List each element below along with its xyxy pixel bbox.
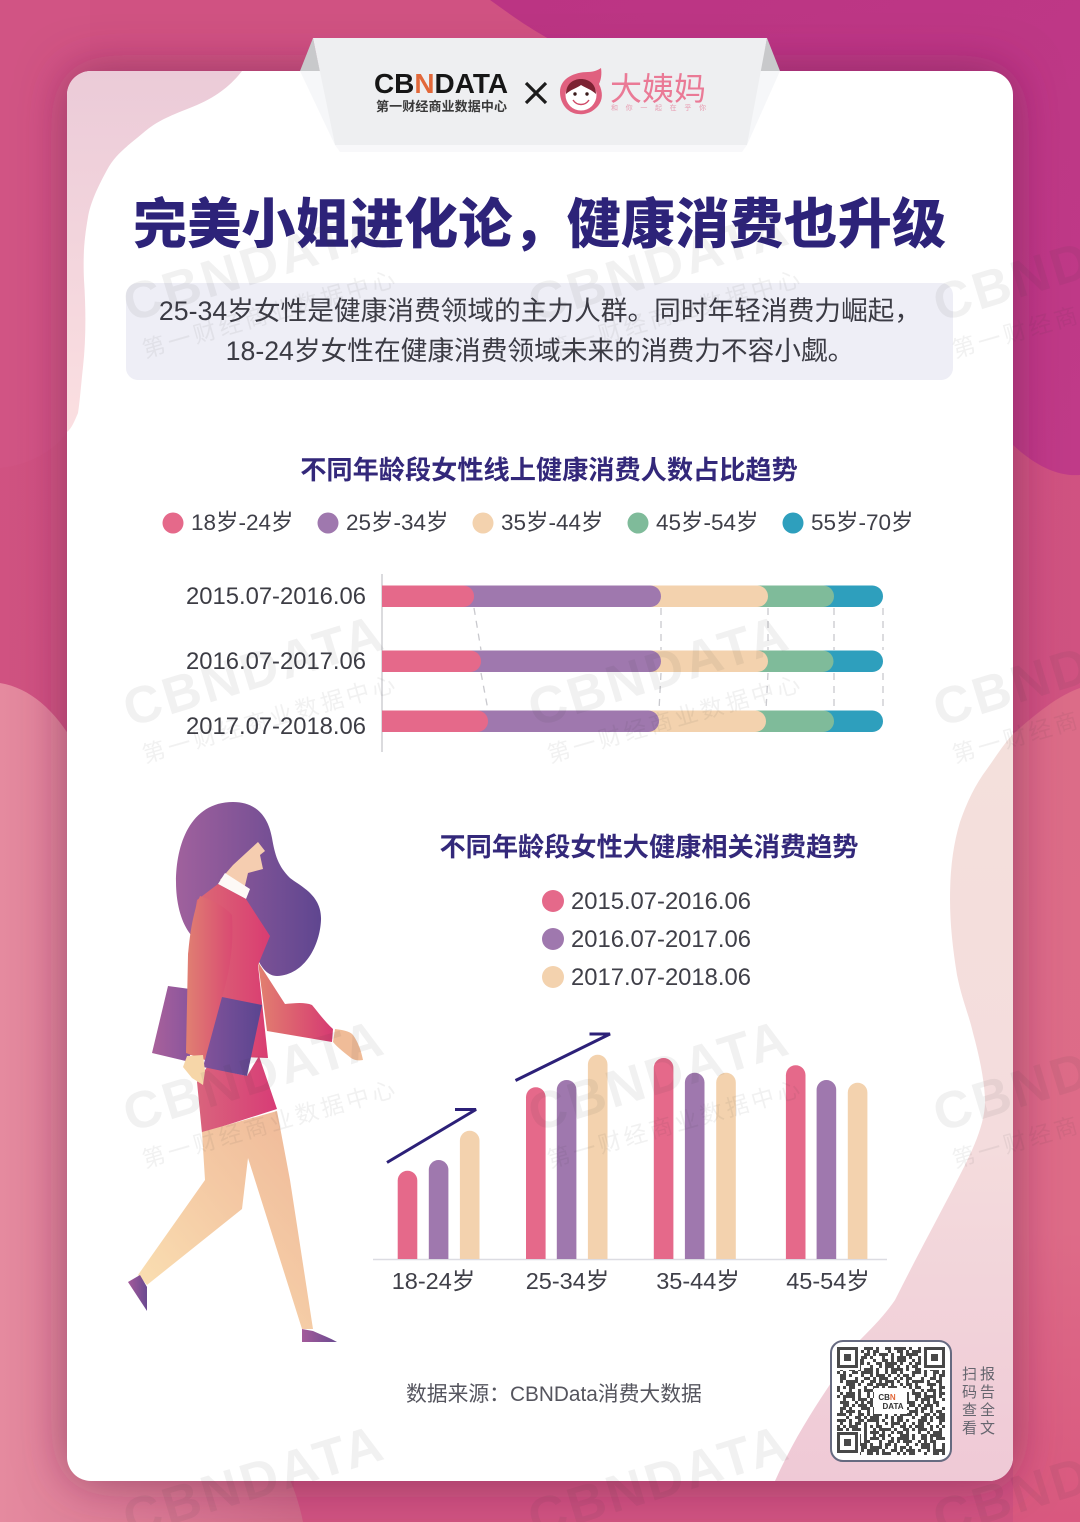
legend: age groups: 55岁-70岁 [811,510,914,535]
folder back [152,986,190,1062]
watermarks: 第一财经商业数据中心 [544,265,806,363]
legend: age groups: 35岁-44岁 [501,510,604,535]
watermarks: CBNDATA [522,199,797,333]
legs [138,1111,313,1329]
legend: periods: 2017.07-2018.06 [571,964,751,991]
QR caption: 全 [980,1401,995,1419]
watermarks: 第一财经商业数据中心 [544,670,806,768]
legend: age groups: 45岁-54岁 [656,510,759,535]
QR caption: 告 [980,1384,995,1401]
group 25-34: 25-34岁 [526,1268,609,1294]
legend: periods: 2016.07-2017.06 [571,926,751,953]
watermarks: CBNDATA [522,1009,797,1143]
group 35-44: 35-44岁 [656,1268,740,1294]
watermarks: CBNDATA [522,604,797,738]
heading: column chart: 不同年龄段女性大健康相关消费趋势 [440,832,858,862]
legend: age groups [162,510,914,535]
watermarks: 第一财经商业数据中心 [139,265,401,363]
QR caption: 文 [980,1420,995,1437]
QR caption: 扫 [962,1366,977,1383]
QR caption: 码 [962,1384,977,1401]
watermarks [117,199,1080,1522]
watermarks: CBNDATA [117,199,392,333]
watermarks: CBNDATA [117,604,392,738]
bar 2017-2018 [382,710,883,732]
bar 2016-2017 [382,650,883,672]
stacked bar chart [186,574,883,752]
intro text panel: 18-24岁女性在健康消费领域未来的消费力不容小觑。 [226,336,854,366]
legend: periods: 2015.07-2016.06 [571,888,751,915]
watermarks: 第一财经商业数据中心 [139,670,401,768]
logo: 大姨妈 [560,68,706,114]
back arm and hand [258,962,363,1060]
QR centre logo: DATA [882,1402,904,1411]
row labels: 2015.07-2016.06 [186,583,366,610]
shoes [128,1275,337,1342]
watermarks: CBNDATA [117,1009,392,1143]
jacket [188,884,270,1058]
illustration: walking woman [128,802,363,1342]
intro text panel [126,283,953,380]
logo: 大姨妈: 大姨妈 [610,71,706,107]
legend: age groups: 18岁-24岁 [191,510,294,535]
group 45-54 [786,1065,870,1294]
title: 完美小姐进化论，健康消费也升级 [133,195,946,255]
near hand [183,1055,205,1085]
icon: times sign [526,83,546,103]
row labels: 2016.07-2017.06 [186,648,366,675]
arrow: rising 25-34 [516,1034,610,1080]
QR centre logo: CBN [878,1393,896,1402]
logo: 大姨妈: 和你一起在乎你 [611,103,706,112]
group 18-24 [392,1131,480,1294]
QR centre logo [874,1388,907,1414]
QR code [831,1341,951,1461]
watermarks: 第一财经商业数据中心 [544,1075,806,1173]
QR caption: 查 [962,1402,977,1419]
QR caption: 看 [962,1420,977,1437]
folder front [203,997,262,1076]
logo: CBNDATA: CBNDATA [374,68,508,99]
arrow: rising 18-24 [387,1110,476,1162]
legend: age groups: 25岁-34岁 [346,510,449,535]
QR finder patterns [836,1346,946,1455]
watermarks: 第一财经商业数据中心 [139,1075,401,1173]
row labels [186,583,366,740]
data source: 数据来源：CBNData消费大数据 [406,1383,702,1406]
header ribbon with logos [300,38,780,152]
group 25-34 [526,1055,609,1294]
intro text panel: 25-34岁女性是健康消费领域的主力人群。同时年轻消费力崛起， [159,296,921,326]
QR caption [962,1366,995,1437]
row labels: 2017.07-2018.06 [186,713,366,740]
group 18-24: 18-24岁 [392,1268,475,1294]
heading: stacked chart: 不同年龄段女性线上健康消费人数占比趋势 [300,455,798,485]
skirt [197,1056,277,1133]
group 45-54: 45-54岁 [786,1268,870,1294]
bar 2015-2016 [382,586,883,607]
logo: CBNDATA [374,68,508,114]
group 35-44 [654,1058,740,1294]
legend: periods [542,888,751,991]
sleeve [186,896,233,1060]
QR caption: 报 [980,1366,995,1383]
logo: CBNDATA: 第一财经商业数据中心 [376,99,507,114]
column chart [373,1034,887,1294]
